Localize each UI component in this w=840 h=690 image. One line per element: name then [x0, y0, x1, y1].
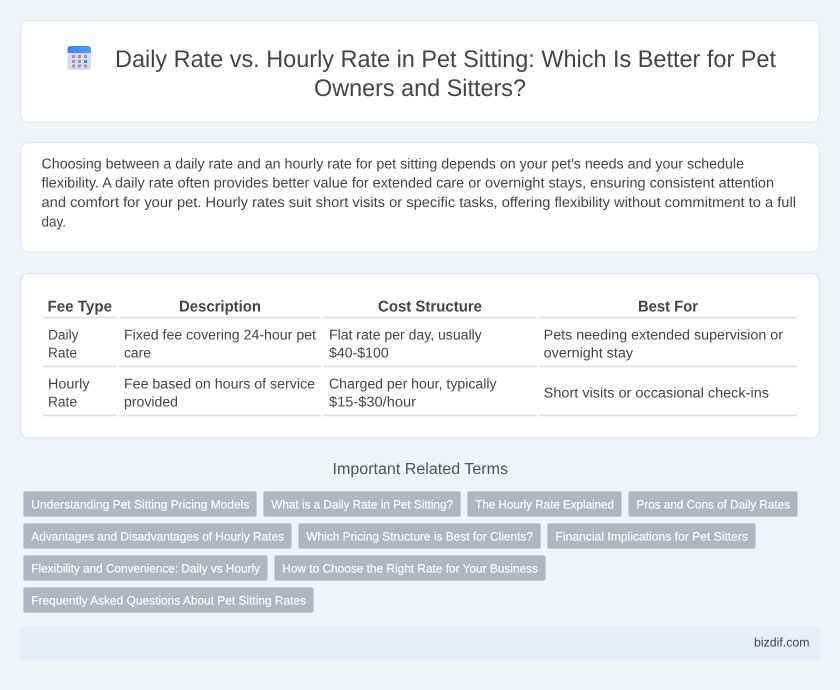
tag: Pros and Cons of Daily Rates: [636, 498, 790, 512]
table row: hourly rate: Fee based on hours of service: [124, 376, 315, 392]
tag: Financial Implications for Pet Sitters: [556, 530, 748, 544]
tag list: related terms: [24, 492, 798, 612]
panel: comparison table: [20, 274, 820, 438]
tag: [548, 524, 756, 548]
tag: How to Choose the Right Rate for Your Business: [282, 562, 538, 576]
table row: daily rate: $40-$100: [329, 345, 389, 361]
tag: What is a Daily Rate in Pet Sitting?: [271, 498, 453, 512]
table row: hourly rate: [48, 376, 769, 410]
tag: [24, 524, 292, 548]
tag: The Hourly Rate Explained: [475, 498, 614, 512]
tag: [24, 588, 314, 612]
tag: [628, 492, 798, 516]
text block: introduction paragraph: day.: [42, 215, 66, 231]
table header row: Description: [179, 299, 261, 316]
heading: important related terms: Important Related Terms: [332, 461, 508, 478]
tag: [264, 492, 460, 516]
tag: Which Pricing Structure is Best for Clients?: [306, 530, 533, 544]
text block: introduction paragraph: flexibility. A daily rate often provides better value for extended care or overnight stays, ensuring consistent attention: [42, 176, 774, 192]
table row: daily rate: [48, 327, 783, 361]
text block: introduction paragraph: and comfort for your pet. Hourly rates suit short visits or specific tasks, offering flexibility without commitment to a full: [42, 195, 796, 211]
table row: hourly rate: Hourly: [48, 376, 90, 392]
footer: [20, 626, 820, 660]
table row: daily rate: Daily: [48, 327, 79, 343]
tag: Frequently Asked Questions About Pet Sitting Rates: [31, 594, 306, 608]
table row: hourly rate: Rate: [48, 394, 77, 410]
heading: [115, 46, 776, 102]
table row: hourly rate: $15-$30/hour: [329, 394, 416, 410]
table row: daily rate: Rate: [48, 345, 77, 361]
table row: hourly rate: provided: [124, 394, 178, 410]
table row: daily rate: overnight stay: [544, 345, 634, 361]
table row: daily rate: care: [124, 345, 151, 361]
table row: hourly rate: Short visits or occasional check-ins: [544, 385, 769, 401]
tag: [298, 524, 540, 548]
table header row: Fee Type: [48, 299, 112, 316]
tag: Understanding Pet Sitting Pricing Models: [31, 498, 249, 512]
tag: Flexibility and Convenience: Daily vs Hourly: [31, 562, 260, 576]
tag: Advantages and Disadvantages of Hourly Rates: [31, 530, 284, 544]
table row: daily rate: Flat rate per day, usually: [329, 327, 483, 343]
text block: introduction paragraph: Choosing between a daily rate and an hourly rate for pet sitting depends on your pet's needs and your schedule: [42, 156, 744, 172]
tag: [24, 556, 268, 580]
heading: Owners and Sitters?: [314, 75, 526, 102]
panel: title card: [20, 20, 820, 122]
tag: [24, 492, 256, 516]
heading: Daily Rate vs. Hourly Rate in Pet Sitting: Which Is Better for Pet: [115, 46, 776, 73]
table row: hourly rate: Charged per hour, typically: [329, 376, 497, 392]
text block: introduction paragraph: [42, 156, 796, 231]
table row: daily rate: Pets needing extended supervision or: [544, 327, 783, 343]
panel: introduction: [20, 142, 820, 252]
table row: daily rate: Fixed fee covering 24-hour pet: [124, 327, 316, 343]
icon: calendar: [68, 46, 91, 70]
table header row: Cost Structure: [378, 299, 482, 316]
footer: bizdif.com: [754, 636, 810, 650]
table header row: [48, 299, 698, 316]
tag: [274, 556, 546, 580]
tag: [468, 492, 622, 516]
table header row: Best For: [638, 299, 698, 316]
